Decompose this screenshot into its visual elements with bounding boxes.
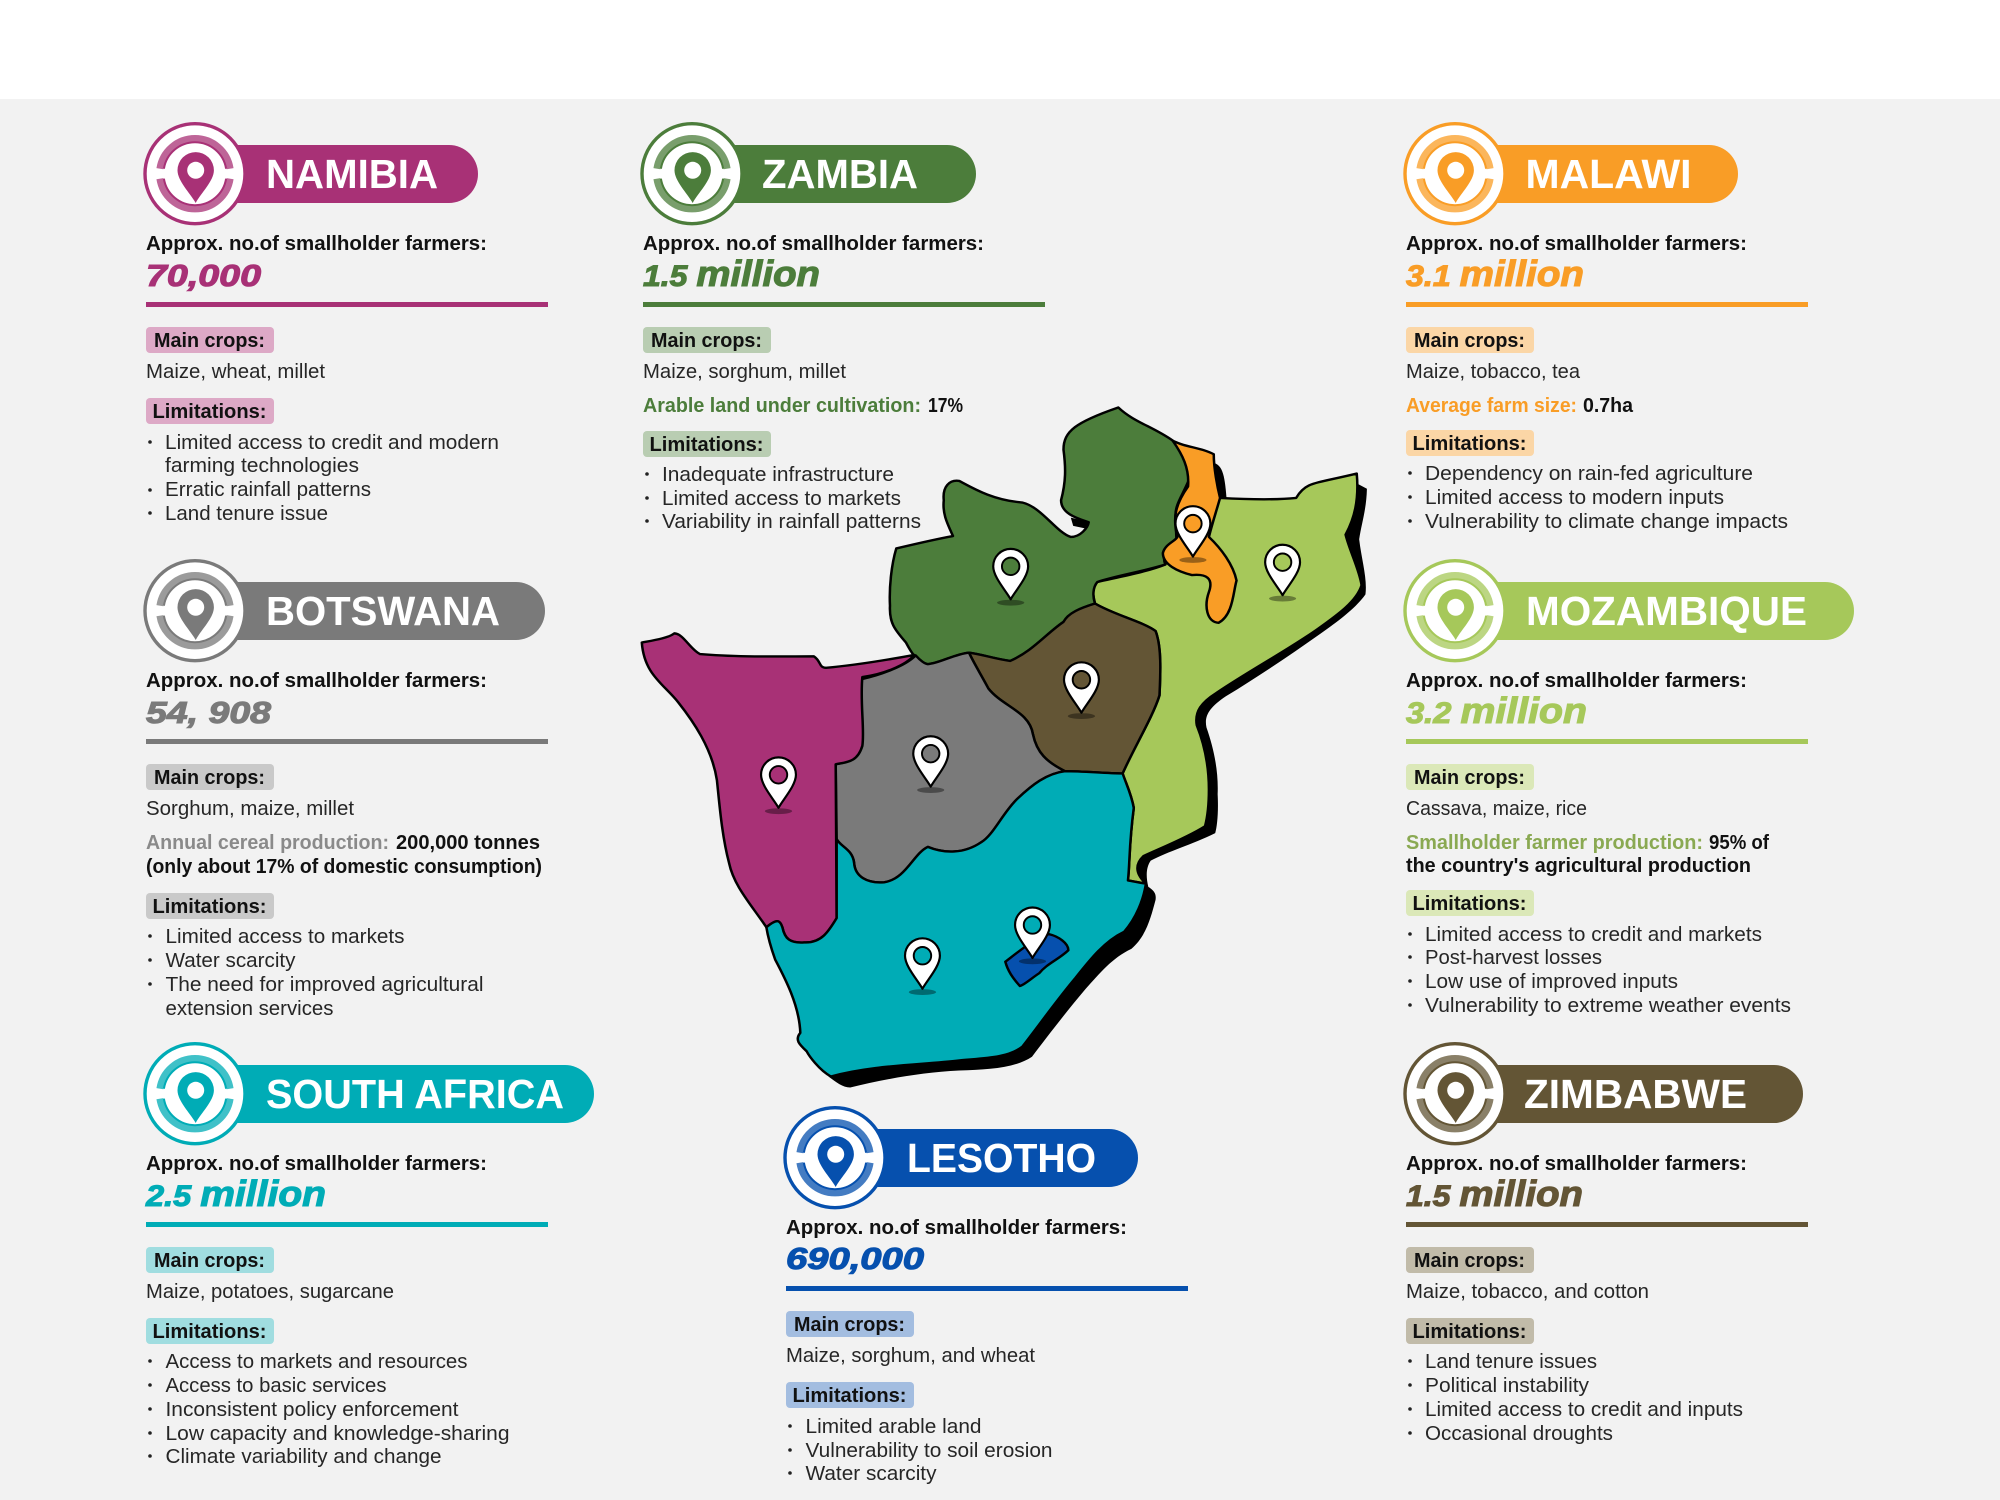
limitations: Erratic rainfall patterns <box>165 478 371 501</box>
smallholder production stat <box>1406 831 1769 877</box>
main crops: Maize, potatoes, sugarcane <box>146 1280 394 1303</box>
badge: Malawi: MALAWI <box>1526 151 1692 197</box>
Mozambique region <box>1093 474 1362 884</box>
main crops: Cassava, maize, rice <box>1406 797 1587 820</box>
smallholder production stat: 95% of <box>1709 831 1769 854</box>
rule <box>146 1222 548 1227</box>
farm size stat: Average farm size: <box>1406 394 1577 417</box>
Botswana region <box>836 653 1065 882</box>
limitations <box>1406 1318 1743 1445</box>
map pin: Zimbabwe <box>1064 662 1099 719</box>
farmer count: Approx. no.of smallholder farmers: <box>786 1216 1127 1239</box>
cereal production stat: (only about 17% of domestic consumption) <box>146 855 542 878</box>
rule <box>146 739 548 744</box>
badge: Namibia: NAMIBIA <box>266 151 438 197</box>
rule <box>643 302 1045 307</box>
badge: Zimbabwe <box>1405 1044 1803 1144</box>
limitations <box>1406 890 1791 1017</box>
main crops: Maize, sorghum, and wheat <box>786 1344 1035 1367</box>
limitations: Climate variability and change <box>166 1445 442 1468</box>
badge: Mozambique: MOZAMBIQUE <box>1526 588 1807 634</box>
South Africa region <box>766 771 1146 1077</box>
panel: Zambia <box>642 124 1045 533</box>
limitations: Variability in rainfall patterns <box>662 510 921 533</box>
limitations: Limitations: <box>1412 892 1526 915</box>
limitations <box>1406 430 1788 533</box>
limitations: Access to basic services <box>166 1374 386 1397</box>
map pin: Zambia <box>993 549 1028 606</box>
limitations: Dependency on rain-fed agriculture <box>1425 462 1753 485</box>
limitations: Land tenure issues <box>1425 1350 1597 1373</box>
limitations <box>146 893 484 1020</box>
map pin: Malawi <box>1175 506 1210 563</box>
main crops <box>786 1311 1035 1367</box>
main crops: Main crops: <box>1414 329 1525 352</box>
Namibia region <box>642 633 914 943</box>
farmer count: Approx. no.of smallholder farmers: <box>1406 669 1747 692</box>
map pin: South Africa <box>905 938 940 995</box>
limitations: Limited access to markets <box>166 925 404 948</box>
limitations: extension services <box>166 997 334 1020</box>
farmer count <box>1406 1152 1747 1214</box>
panel: Zimbabwe <box>1405 1044 1808 1445</box>
main crops: Maize, wheat, millet <box>146 360 325 383</box>
limitations: Political instability <box>1425 1374 1590 1397</box>
limitations: Limited access to modern inputs <box>1425 486 1724 509</box>
farmer count: 2.5 million <box>145 1173 326 1214</box>
badge: Namibia <box>145 124 478 224</box>
limitations: Limited access to credit and markets <box>1425 923 1762 946</box>
main crops <box>146 327 325 383</box>
farmer count <box>643 232 984 294</box>
badge: Lesotho <box>785 1108 1138 1208</box>
panel: Lesotho <box>785 1108 1188 1485</box>
badge: Botswana: BOTSWANA <box>266 588 500 634</box>
badge: Mozambique <box>1405 561 1854 661</box>
badge: Zambia: ZAMBIA <box>762 151 918 197</box>
limitations: Land tenure issue <box>165 502 328 525</box>
farmer count: Approx. no.of smallholder farmers: <box>1406 1152 1747 1175</box>
panel: Botswana <box>145 561 548 1020</box>
main crops: Maize, tobacco, tea <box>1406 360 1581 383</box>
main crops: Maize, tobacco, and cotton <box>1406 1280 1649 1303</box>
limitations: Limitations: <box>1412 432 1526 455</box>
limitations: Inadequate infrastructure <box>662 463 894 486</box>
limitations: Limited access to markets <box>662 487 901 510</box>
limitations: Vulnerability to soil erosion <box>806 1439 1052 1462</box>
limitations: Limitations: <box>1412 1320 1526 1343</box>
farm size stat: 0.7ha <box>1583 394 1634 417</box>
rule <box>1406 1222 1808 1227</box>
main crops <box>146 1247 394 1303</box>
farmer count <box>1406 669 1747 731</box>
Malawi region <box>1163 441 1237 623</box>
farmer count: Approx. no.of smallholder farmers: <box>146 669 487 692</box>
map drop shadow: east and south coast <box>828 484 1367 1088</box>
panel: Mozambique <box>1405 561 1854 1017</box>
main crops: Sorghum, maize, millet <box>146 797 354 820</box>
limitations <box>786 1382 1052 1485</box>
map pin: Mozambique <box>1265 545 1300 601</box>
main crops: Main crops: <box>154 766 265 789</box>
rule <box>786 1286 1188 1291</box>
main crops: Main crops: <box>1414 1249 1525 1272</box>
farmer count: 1.5 million <box>1406 1173 1583 1214</box>
limitations: Limitations: <box>152 400 266 423</box>
Lesotho region <box>1005 934 1068 986</box>
arable land stat: Arable land under cultivation: <box>643 394 921 417</box>
badge: Lesotho: LESOTHO <box>907 1135 1096 1181</box>
limitations <box>146 1318 510 1468</box>
map of southern Africa <box>642 407 1367 1088</box>
panel: Namibia <box>145 124 548 525</box>
main crops <box>1406 764 1587 820</box>
map pin: Lesotho <box>1015 908 1050 964</box>
main crops <box>1406 327 1581 383</box>
limitations: Access to markets and resources <box>166 1350 468 1373</box>
farmer count: 54, 908 <box>146 695 272 730</box>
farmer count: Approx. no.of smallholder farmers: <box>146 1152 487 1175</box>
farmer count <box>146 669 487 730</box>
limitations: Water scarcity <box>166 949 296 972</box>
limitations: Post-harvest losses <box>1425 946 1602 969</box>
cereal production stat: Annual cereal production: <box>146 831 389 854</box>
map drop shadow: Malawi edge <box>1212 463 1227 503</box>
badge: South Africa <box>145 1044 594 1144</box>
main crops: Main crops: <box>651 329 762 352</box>
farmer count: Approx. no.of smallholder farmers: <box>1406 232 1747 255</box>
farmer count: Approx. no.of smallholder farmers: <box>146 232 487 255</box>
limitations: Limitations: <box>792 1384 906 1407</box>
farmer count: 3.1 million <box>1406 253 1584 294</box>
smallholder production stat: Smallholder farmer production: <box>1406 831 1703 854</box>
farmer count <box>145 1152 487 1214</box>
limitations: Low use of improved inputs <box>1425 970 1678 993</box>
limitations: Low capacity and knowledge-sharing <box>166 1422 510 1445</box>
map notch shadow <box>1071 518 1090 529</box>
rule <box>146 302 548 307</box>
badge: South Africa: SOUTH AFRICA <box>266 1071 564 1117</box>
limitations: Inconsistent policy enforcement <box>166 1398 459 1421</box>
main crops: Main crops: <box>1414 766 1525 789</box>
badge: Botswana <box>145 561 545 661</box>
farmer count: 690,000 <box>786 1241 924 1276</box>
main crops <box>1406 1247 1649 1303</box>
limitations: Vulnerability to extreme weather events <box>1425 994 1791 1017</box>
farmer count: 3.2 million <box>1406 690 1587 731</box>
arable land stat: 17% <box>928 394 963 417</box>
panel: Malawi <box>1405 124 1808 533</box>
limitations: Occasional droughts <box>1425 1422 1613 1445</box>
farmer count <box>146 232 487 293</box>
map pin: Botswana <box>913 736 948 793</box>
limitations: Limitations: <box>152 1320 266 1343</box>
main crops <box>643 327 846 383</box>
farmer count: 1.5 million <box>643 253 820 294</box>
Zimbabwe region <box>969 604 1160 773</box>
farmer count: Approx. no.of smallholder farmers: <box>643 232 984 255</box>
limitations: Limited arable land <box>806 1415 982 1438</box>
main crops: Main crops: <box>154 1249 265 1272</box>
limitations: farming technologies <box>165 454 359 477</box>
limitations <box>146 398 499 525</box>
smallholder production stat: the country's agricultural production <box>1406 854 1751 877</box>
limitations: Limitations: <box>152 895 266 918</box>
map pin: Namibia <box>761 757 796 814</box>
limitations: Limited access to credit and inputs <box>1425 1398 1743 1421</box>
cereal production stat <box>146 831 542 878</box>
limitations: The need for improved agricultural <box>166 973 484 996</box>
farmer count: 70,000 <box>146 258 261 293</box>
main crops <box>146 764 354 820</box>
limitations: Limitations: <box>650 433 764 456</box>
panel: South Africa <box>145 1044 594 1468</box>
cereal production stat: 200,000 tonnes <box>396 831 540 854</box>
limitations <box>643 431 921 533</box>
Zambia region <box>890 407 1189 664</box>
limitations: Limited access to credit and modern <box>165 431 499 454</box>
rule <box>1406 739 1808 744</box>
badge: Zimbabwe: ZIMBABWE <box>1524 1071 1747 1117</box>
farmer count <box>786 1216 1127 1276</box>
main crops: Main crops: <box>154 329 265 352</box>
badge: Zambia <box>642 124 976 224</box>
limitations: Vulnerability to climate change impacts <box>1425 510 1788 533</box>
main crops: Main crops: <box>794 1313 905 1336</box>
rule <box>1406 302 1808 307</box>
limitations: Water scarcity <box>806 1462 937 1485</box>
farmer count <box>1406 232 1747 294</box>
badge: Malawi <box>1405 124 1738 224</box>
main crops: Maize, sorghum, millet <box>643 360 846 383</box>
